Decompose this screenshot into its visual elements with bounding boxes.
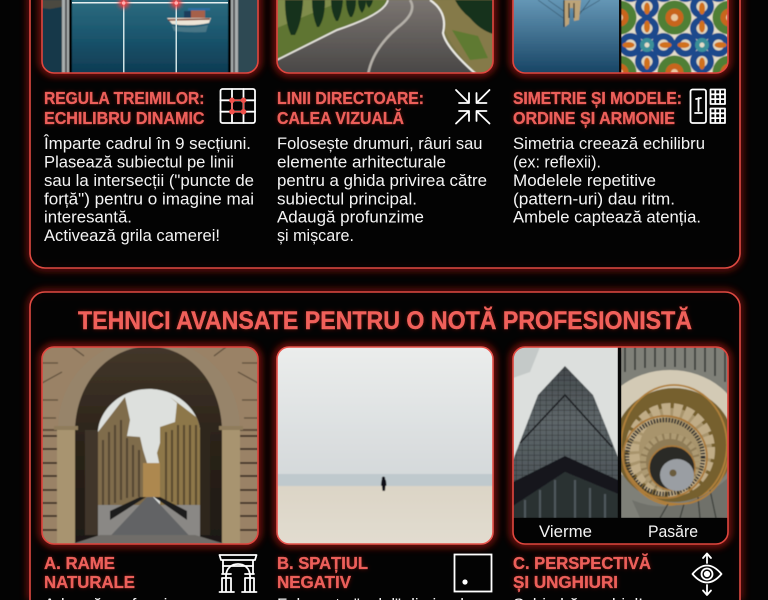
title: advanced techniques: TEHNICI AVANSATE PENTRU O NOTĂ PROFESIONISTĂ [78,306,692,335]
panel: advanced techniques [30,292,742,600]
heading: perspectiva si unghiuri: ȘI UNGHIURI [513,572,618,592]
text: simetrie si modele: (ex: reflexii). [513,154,601,172]
heading: perspectiva si unghiuri [513,552,651,592]
heading: spatiul negativ [277,553,368,592]
text: regula treimilor: Activează grila camerei! [44,227,220,245]
heading: perspectiva si unghiuri: C. PERSPECTIVĂ [513,552,651,573]
text: regula treimilor: Plasează subiectul pe linii [44,154,234,172]
heading: simetrie si modele: SIMETRIE ȘI MODELE: [513,88,682,108]
heading: regula treimilor: REGULA TREIMILOR: [44,88,204,108]
heading: spatiul negativ: NEGATIV [277,572,351,592]
photo: symmetry reflection and tile pattern [513,0,728,75]
text: regula treimilor: Împarte cadrul în 9 secțiuni. [43,134,251,153]
heading: linii directoare: LINII DIRECTOARE: [277,88,424,108]
text: regula treimilor [43,134,254,245]
photo: rule of thirds lake with phone grid [42,0,258,75]
icon: converging arrows [456,90,490,124]
icon: symmetry and pattern [690,90,725,123]
text: simetrie si modele: Simetria creează echilibru [513,135,705,153]
heading: spatiul negativ: B. SPAȚIUL [277,553,368,573]
panel: basic composition rules [30,0,740,268]
text: linii directoare: și mișcare. [277,227,354,245]
text: regula treimilor: sau la intersecții ("puncte de [44,172,254,190]
heading: linii directoare: CALEA VIZUALĂ [277,107,404,128]
label: worm view: Vierme [539,522,592,541]
heading: simetrie si modele [513,88,682,128]
icon: thirds grid [220,89,255,123]
label: bird view: Pasăre [648,522,698,541]
heading: regula treimilor: ECHILIBRU DINAMIC [44,108,205,128]
icon: negative space square [454,554,492,592]
text: simetrie si modele: (pattern-uri) dau ritm. [513,190,675,208]
text: simetrie si modele: Modelele repetitive [513,172,656,190]
text: linii directoare [277,135,487,245]
icon: eye with up and down arrows [692,554,722,595]
photo: winding road with cypresses [277,0,493,75]
text: regula treimilor: interesantă. [44,209,132,227]
heading: rame naturale: NATURALE [44,572,135,592]
text: linii directoare: Folosește drumuri, râuri sau [277,135,482,153]
text: regula treimilor: forță") pentru o imagine mai [44,190,254,208]
text: simetrie si modele: Ambele captează atenția. [513,209,701,227]
text: linii directoare: Adaugă profunzime [277,209,424,227]
photo: stone arch framing a street [42,338,258,545]
heading: rame naturale [44,553,135,592]
heading: rame naturale: A. RAME [44,553,115,573]
text: linii directoare: elemente arhitecturale [277,154,446,172]
heading: linii directoare [277,88,424,128]
text: linii directoare: subiectul principal. [277,190,417,208]
heading: simetrie si modele: ORDINE ȘI ARMONIE [513,108,675,128]
text: simetrie si modele [513,135,705,227]
heading: regula treimilor [44,88,205,128]
icon: arch [220,555,256,592]
photo: lone figure on empty beach [277,347,493,544]
photo: worm and bird perspective [513,347,742,544]
text: linii directoare: pentru a ghida privirea către [277,172,487,190]
